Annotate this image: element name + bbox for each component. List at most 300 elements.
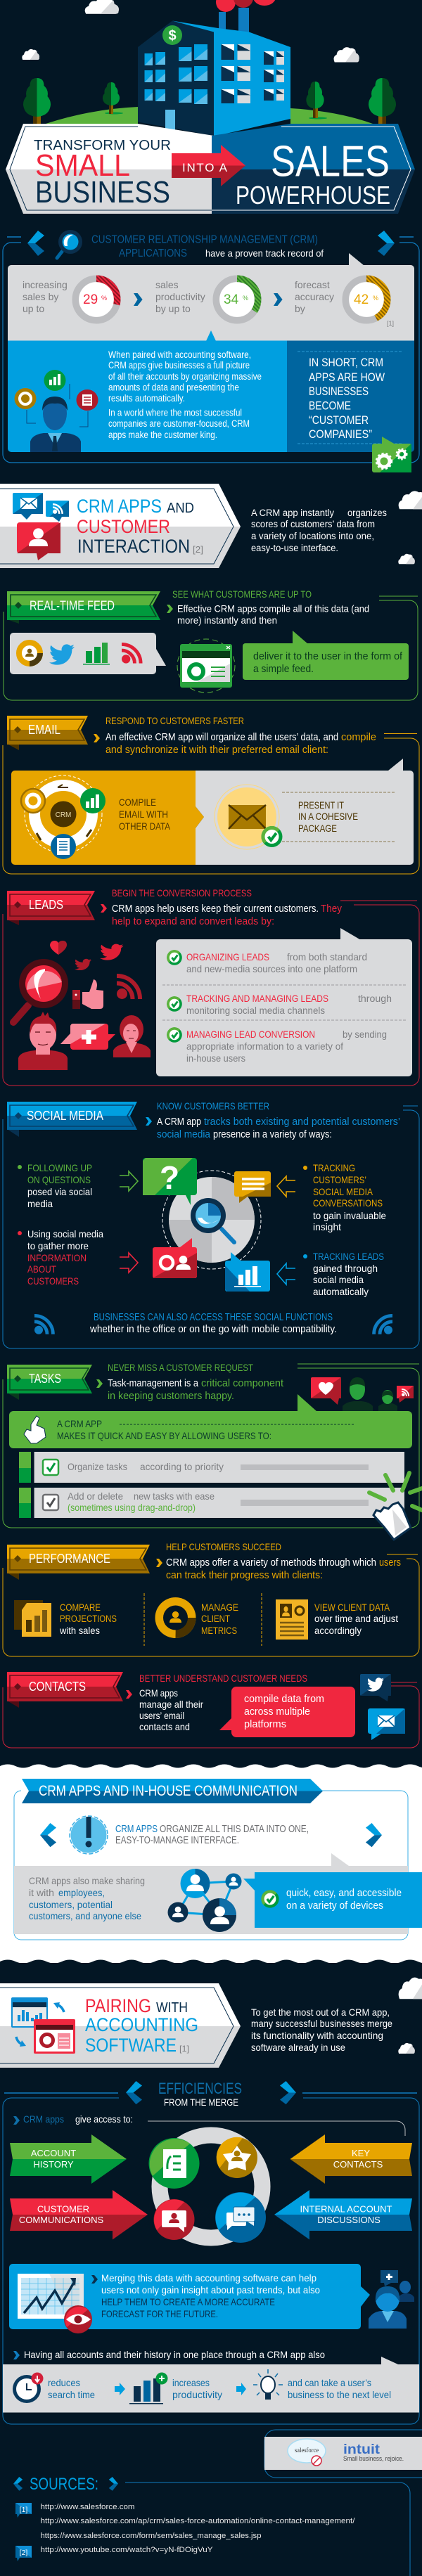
benefit: reduces search time bbox=[13, 2372, 95, 2403]
stat: 42 percent: [1] bbox=[387, 320, 394, 327]
arrow: key contacts bbox=[290, 2134, 412, 2184]
arrow: key contacts: CONTACTS bbox=[333, 2159, 383, 2170]
text: allowing users: MAKES IT QUICK AND EASY BY ALLOWING USERS TO: bbox=[57, 1430, 271, 1441]
text block: crm app intro: organizes bbox=[347, 508, 387, 518]
source links: http://www.youtube.com/watch?v=yN-fDOigVuY bbox=[41, 2546, 213, 2554]
arrow: into a: INTO A bbox=[182, 161, 228, 174]
item: managing lead conversion: by sending bbox=[343, 1029, 387, 1040]
logo: intuit: Small business, rejoice. bbox=[343, 2455, 404, 2463]
stat: 29 percent: 29 bbox=[83, 292, 98, 307]
text block: tracks customers bbox=[157, 1116, 400, 1140]
panel: in short callout: COMPANIES” bbox=[309, 427, 372, 441]
text: sharing: it with bbox=[29, 1887, 54, 1898]
text: organize interface: EASY-TO-MANAGE INTERFACE. bbox=[115, 1834, 239, 1846]
bubble: chart bbox=[225, 1252, 270, 1292]
panel: accounting explanation bbox=[8, 330, 287, 452]
icon: mail bubble bbox=[368, 1708, 405, 1740]
item: following up: ON QUESTIONS bbox=[27, 1174, 91, 1185]
arrow: account history: ACCOUNT bbox=[31, 2148, 76, 2158]
callout: simple feed bbox=[243, 631, 409, 680]
text block: task management: Task-management is a bbox=[108, 1378, 199, 1389]
ribbon: tasks bbox=[7, 1365, 92, 1400]
icon: magnifier bbox=[57, 230, 82, 258]
text: merging data: FORECAST FOR THE FUTURE. bbox=[101, 2308, 218, 2319]
icon: contact bubble bbox=[17, 522, 60, 560]
logo: salesforce bbox=[288, 2439, 326, 2466]
panel: in short callout bbox=[287, 340, 414, 452]
icon: chevron bbox=[101, 904, 107, 913]
heading: customer relationship management: CUSTOMER RELATIONSHIP MANAGEMENT (CRM) bbox=[91, 234, 318, 246]
text: merging data: Merging this data with accounting software can help bbox=[101, 2272, 316, 2284]
icon: chevron bbox=[146, 1117, 152, 1126]
callout: quick easy accessible: on a variety of devices bbox=[286, 1900, 383, 1912]
title text: sales powerhouse bbox=[236, 138, 390, 210]
icon: pointing hand bbox=[24, 1416, 46, 1443]
bubble: conversation bbox=[234, 1171, 271, 1203]
heading: pairing with accounting software bbox=[85, 1995, 198, 2056]
heading: customer relationship management: have a proven track record of bbox=[205, 247, 324, 259]
ribbon: social media: SOCIAL MEDIA bbox=[27, 1109, 103, 1123]
item: tracking leads: TRACKING LEADS bbox=[313, 1251, 384, 1262]
panel: quick and easy bbox=[9, 1394, 412, 1448]
icon: clicking hand bbox=[369, 1473, 422, 1540]
row: organize tasks bbox=[19, 1452, 404, 1483]
row: add or delete: new tasks with ease bbox=[134, 1490, 215, 1502]
section: leads bbox=[3, 887, 419, 1086]
text block: accounting software: apps make the customer king. bbox=[108, 430, 217, 440]
illustration: lead icons and people bbox=[13, 941, 151, 1070]
heading: customer relationship management: APPLICATIONS bbox=[119, 247, 187, 259]
text block: organize and compile: An effective CRM app will organize all the users’ data, and bbox=[106, 732, 338, 743]
ribbon: real-time feed: REAL-TIME FEED bbox=[30, 599, 115, 613]
item: gather information: to gather more bbox=[27, 1240, 89, 1251]
text: merging data bbox=[101, 2272, 320, 2319]
icon: left chevron bbox=[27, 231, 44, 256]
ribbon: email: EMAIL bbox=[28, 723, 60, 737]
title text: transform your small business: TRANSFORM YOUR bbox=[34, 138, 171, 153]
callout: compile data: compile data from bbox=[244, 1694, 324, 1705]
clouds: header bbox=[22, 0, 359, 62]
text: allowing users: A CRM APP bbox=[57, 1418, 102, 1429]
stat: 34 percent: % bbox=[243, 295, 248, 302]
item: tracking conversations: CONVERSATIONS bbox=[313, 1197, 383, 1209]
section: email bbox=[3, 715, 419, 874]
heading: customer relationship management bbox=[91, 234, 324, 259]
text block: tracks customers: presence in a variety of ways: bbox=[213, 1129, 332, 1140]
stat: 34 percent: by up to bbox=[155, 303, 191, 314]
text block: task management: in keeping customers happy. bbox=[108, 1391, 234, 1402]
item: manage client metrics: METRICS bbox=[201, 1625, 237, 1636]
text: crm apps give access: CRM apps bbox=[23, 2113, 64, 2125]
icon: chevron bbox=[156, 1559, 162, 1567]
text: compile email with other data: EMAIL WITH bbox=[119, 809, 168, 820]
icon: twitter bird bbox=[49, 644, 75, 665]
title text: sales powerhouse: SALES bbox=[271, 138, 390, 186]
stat: 34 percent bbox=[155, 278, 258, 321]
heading: crm apps and customer interaction bbox=[77, 496, 203, 557]
icon: customer communications bbox=[153, 2199, 194, 2240]
source links: http://www.salesforce.com/ap/crm/sales-force-automation/online-contact-management/ bbox=[41, 2517, 355, 2525]
ribbon: in-house communication: CRM APPS AND IN-HOUSE COMMUNICATION bbox=[39, 1783, 298, 1799]
text block: track progress bbox=[166, 1557, 401, 1581]
icon: chevron bbox=[91, 2275, 98, 2284]
item: view client data: VIEW CLIENT DATA bbox=[314, 1602, 390, 1613]
icon: birds bbox=[75, 944, 124, 970]
text block: accounting software: When paired with accounting software, bbox=[108, 349, 251, 360]
item: organizing leads: from both standard bbox=[287, 951, 367, 962]
icon: right chevron bbox=[280, 2081, 296, 2104]
illustration: factory with trees bbox=[23, 0, 396, 136]
icon: rss bbox=[122, 644, 141, 664]
text block: keep customers: CRM apps help users keep their current customers. bbox=[112, 903, 319, 915]
icon: key contacts bbox=[217, 2137, 257, 2178]
heading: pairing with accounting software: WITH bbox=[156, 2000, 188, 2016]
wave edge bbox=[0, 1960, 422, 1969]
text block: merge functionality: software already in use bbox=[251, 2042, 345, 2053]
diagram: people network bbox=[167, 1869, 242, 1932]
benefit: increases productivity bbox=[129, 2372, 222, 2404]
icon: account history bbox=[149, 2138, 200, 2189]
heading: crm apps and customer interaction: AND bbox=[167, 501, 194, 516]
badge: 1: [1] bbox=[20, 2506, 27, 2514]
item: organizing leads: and new-media sources into one platform bbox=[186, 963, 357, 974]
item: compare projections bbox=[14, 1600, 117, 1637]
heading: help customers succeed: HELP CUSTOMERS SUCCEED bbox=[166, 1541, 281, 1552]
text: allowing users bbox=[57, 1418, 271, 1441]
text: compile email with other data: OTHER DATA bbox=[119, 820, 171, 832]
text: present it in a cohesive package: PACKAGE bbox=[298, 823, 337, 834]
stat: 34 percent: productivity bbox=[155, 291, 205, 302]
bubble: question: ? bbox=[160, 1159, 179, 1196]
section: sources bbox=[13, 2475, 410, 2576]
item: tracking conversations: to gain invaluable bbox=[313, 1210, 386, 1221]
logo: intuit bbox=[343, 2442, 404, 2463]
title text: transform your small business: BUSINESS bbox=[35, 175, 170, 210]
text block: merge functionality: its functionality with accounting bbox=[251, 2030, 383, 2041]
item: compare projections: COMPARE bbox=[60, 1602, 101, 1613]
heading: crm apps and customer interaction: [2] bbox=[193, 544, 203, 555]
item: following up: posed via social bbox=[27, 1186, 92, 1197]
item: gather information: INFORMATION bbox=[27, 1252, 87, 1263]
text block: crm app intro: scores of customers’ data from bbox=[251, 519, 375, 529]
stat: 29 percent bbox=[23, 278, 117, 321]
icon: chevron bbox=[274, 293, 283, 306]
arrow: key contacts: KEY bbox=[352, 2148, 370, 2158]
arrow: into a bbox=[172, 145, 245, 186]
icon: right chevron bbox=[366, 1823, 382, 1847]
ribbon: contacts: CONTACTS bbox=[29, 1680, 86, 1694]
icon: contacts donut bbox=[19, 643, 43, 666]
panel: in short callout: BECOME bbox=[309, 399, 351, 412]
icon: magnifier bbox=[191, 1198, 234, 1242]
heading: pairing with accounting software: PAIRING bbox=[85, 1995, 151, 2016]
item: following up bbox=[18, 1162, 92, 1209]
arrow: account history: HISTORY bbox=[33, 2159, 74, 2170]
row: organize tasks: Organize tasks bbox=[68, 1461, 127, 1472]
diagram: crm cycle bbox=[21, 775, 106, 859]
source links: https://www.salesforce.com/form/sem/sales_manage_sales.jsp bbox=[41, 2532, 262, 2540]
text block: task management: critical component bbox=[201, 1378, 283, 1389]
text block: tracks customers: A CRM app bbox=[157, 1116, 201, 1128]
source links: http://www.salesforce.com bbox=[41, 2503, 135, 2511]
icon: heart bbox=[50, 941, 67, 955]
stat: 34 percent: sales bbox=[155, 279, 179, 290]
text: merging data: HELP THEM TO CREATE A MORE ACCURATE bbox=[101, 2296, 275, 2307]
heading: crm apps and customer interaction: INTERACTION bbox=[77, 536, 190, 557]
arrows: outline bbox=[120, 1171, 295, 1284]
text block: crm app intro: a variety of locations into one, bbox=[251, 531, 374, 541]
item: tracking leads: social media bbox=[313, 1274, 364, 1285]
clouds: right bbox=[398, 491, 422, 564]
heading: sources: SOURCES: bbox=[30, 2475, 98, 2494]
text block: organize and compile: compile bbox=[341, 732, 376, 743]
item: gather information: CUSTOMERS bbox=[27, 1275, 79, 1287]
illustration: factory with trees: $ bbox=[168, 28, 177, 44]
row: organize tasks: according to priority bbox=[140, 1461, 224, 1472]
figure: woman bbox=[113, 1015, 151, 1057]
text block: organize and compile: and synchronize it with their preferred email client: bbox=[106, 745, 328, 756]
item: tracking conversations: insight bbox=[313, 1221, 341, 1232]
text: merging data: users not only gain insight about past trends, but also bbox=[101, 2284, 320, 2295]
heading: begin the conversion process: BEGIN THE CONVERSION PROCESS bbox=[112, 887, 252, 899]
text block: accounting software: companies are customer-focused, CRM bbox=[108, 418, 250, 429]
text block: merge functionality: To get the most out of a CRM app, bbox=[251, 2007, 390, 2018]
item: organizing leads: ORGANIZING LEADS bbox=[186, 951, 269, 962]
item: tracking conversations: TRACKING bbox=[313, 1162, 355, 1173]
text block: track progress: users bbox=[379, 1557, 401, 1569]
section: crm applications proven track record bbox=[3, 230, 419, 472]
icon: chevron bbox=[167, 605, 173, 613]
badge: 2: [2] bbox=[20, 2549, 27, 2557]
ribbon: tasks: TASKS bbox=[29, 1372, 61, 1386]
badge: 2 bbox=[15, 2546, 32, 2561]
heading: never miss a customer request: NEVER MISS A CUSTOMER REQUEST bbox=[108, 1362, 253, 1373]
item: managing lead conversion: in-house users bbox=[186, 1052, 245, 1064]
arrow: customer communications bbox=[10, 2190, 148, 2240]
text block: crm app intro bbox=[251, 508, 387, 553]
icon: magnifier bbox=[13, 959, 68, 1022]
text block: keep customers: help to expand and convert leads by: bbox=[112, 916, 274, 927]
item: tracking conversations: CUSTOMERS’ bbox=[313, 1174, 366, 1185]
icon: rss bubble bbox=[46, 501, 69, 522]
text block: compile: more) instantly and then bbox=[177, 614, 277, 626]
item: managing lead conversion bbox=[167, 1027, 387, 1064]
section: efficiencies bbox=[3, 2080, 419, 2424]
icon: bar chart bbox=[83, 643, 110, 665]
heading: better understand customer needs: BETTER UNDERSTAND CUSTOMER NEEDS bbox=[139, 1673, 307, 1684]
text block: accounting software: results automatically. bbox=[108, 393, 185, 404]
ribbon: performance: PERFORMANCE bbox=[29, 1552, 110, 1566]
bubble: question bbox=[143, 1158, 197, 1205]
stat: 29 percent: % bbox=[101, 295, 107, 302]
text block: manage email contacts: contacts and bbox=[139, 1721, 190, 1732]
icon: rss bbox=[117, 976, 140, 999]
panel: compile email bbox=[11, 759, 414, 865]
banner: pairing with accounting software bbox=[0, 1983, 241, 2068]
arrow bbox=[236, 2383, 246, 2395]
text block: accounting software: CRM apps give businesses a full picture bbox=[108, 360, 250, 371]
text block: keep customers bbox=[112, 903, 343, 927]
panel: lead management list bbox=[156, 928, 412, 1076]
heading: pairing with accounting software: SOFTWARE bbox=[85, 2035, 177, 2056]
text: sharing: customers, and anyone else bbox=[29, 1910, 141, 1921]
text: crm apps give access bbox=[13, 2113, 133, 2125]
item: view client data: over time and adjust bbox=[314, 1613, 398, 1624]
item: tracking and managing leads: through bbox=[358, 993, 392, 1004]
item: managing lead conversion: appropriate information to a variety of bbox=[186, 1041, 343, 1052]
item: gather information bbox=[18, 1228, 103, 1287]
title text: transform your small business: SMALL bbox=[35, 148, 130, 183]
text block: accounting software: of all their accounts by organizing massive bbox=[108, 371, 262, 382]
icon: left chevron bbox=[126, 2081, 142, 2104]
text block: task management bbox=[108, 1378, 283, 1402]
icon: plus bubble bbox=[60, 1024, 115, 1050]
text block: mobile compatibility: whether in the office or on the go with mobile compatibility. bbox=[89, 1324, 337, 1335]
icon: internal discussions bbox=[215, 2192, 266, 2243]
heading: efficiencies: EFFICIENCIES bbox=[158, 2080, 242, 2097]
benefit: reduces search time: reduces bbox=[48, 2377, 80, 2388]
item: gather information: Using social media bbox=[27, 1228, 103, 1239]
ribbon: social media bbox=[7, 1102, 137, 1137]
stat: 42 percent: accuracy bbox=[295, 291, 334, 302]
text: compile email with other data: COMPILE bbox=[119, 797, 156, 808]
text block: manage email contacts: CRM apps bbox=[139, 1687, 178, 1699]
item: manage client metrics bbox=[155, 1597, 238, 1638]
text: sharing: employees, bbox=[58, 1887, 105, 1898]
item: following up: media bbox=[27, 1198, 53, 1209]
icon: chevron bbox=[126, 1690, 132, 1699]
icon: left chevron bbox=[40, 1823, 56, 1847]
item: view client data bbox=[276, 1599, 398, 1640]
title text: sales powerhouse: POWERHOUSE bbox=[236, 181, 390, 210]
icon: chevron bbox=[96, 1379, 103, 1388]
item: tracking and managing leads: TRACKING AND MANAGING LEADS bbox=[186, 993, 328, 1004]
white section background bbox=[0, 1765, 422, 1963]
diagram: social hub bbox=[143, 1158, 271, 1292]
stat: 42 percent: 42 bbox=[354, 292, 369, 307]
item: gather information: ABOUT bbox=[27, 1263, 56, 1275]
stat: 42 percent: by bbox=[295, 303, 305, 314]
banner: crm apps and customer interaction bbox=[0, 484, 241, 568]
stat: 29 percent: increasing bbox=[23, 279, 68, 290]
text block: track progress: CRM apps offer a variety of methods through which bbox=[166, 1557, 376, 1569]
figure: people with bubble bbox=[369, 2270, 414, 2329]
figure: man bbox=[18, 1012, 68, 1070]
callout: simple feed: deliver it to the user in the form of bbox=[253, 650, 403, 662]
icon: feed window bbox=[177, 639, 235, 693]
item: tracking leads bbox=[303, 1251, 384, 1297]
title banner bbox=[6, 124, 415, 214]
stat: 42 percent: % bbox=[373, 295, 378, 302]
icon: thumbs up bbox=[72, 979, 103, 1009]
item: tracking leads: gained through bbox=[313, 1263, 378, 1274]
text block: tracks customers: tracks both existing and potential customers’ bbox=[204, 1116, 400, 1128]
text: sharing: CRM apps also make sharing bbox=[29, 1875, 145, 1886]
ribbon: email bbox=[7, 716, 88, 750]
icon: right chevron bbox=[378, 231, 395, 256]
row: add or delete: (sometimes using drag-and-drop) bbox=[68, 1502, 196, 1513]
text block: crm app intro: A CRM app instantly bbox=[251, 508, 334, 518]
panel: data source icons bbox=[10, 633, 166, 674]
text: organize interface: CRM APPS bbox=[115, 1823, 158, 1835]
illustration: businessman with app icons bbox=[14, 370, 98, 452]
stat: 42 percent: forecast bbox=[295, 279, 330, 290]
section: tasks bbox=[3, 1362, 422, 1540]
diagram: access ring bbox=[149, 2135, 266, 2243]
item: manage client metrics: MANAGE bbox=[201, 1602, 238, 1613]
item: compare projections: PROJECTIONS bbox=[60, 1613, 117, 1624]
icon: gears bubble bbox=[372, 437, 411, 472]
icon: envelope with check bbox=[215, 785, 283, 849]
text block: accounting software: amounts of data and presenting the bbox=[108, 382, 239, 393]
text block: organize and compile bbox=[106, 732, 376, 756]
heading: see what customers are up to: SEE WHAT CUSTOMERS ARE UP TO bbox=[172, 588, 312, 600]
arrow: internal account discussions bbox=[274, 2190, 412, 2240]
stat: 29 percent: up to bbox=[23, 303, 44, 314]
icon: envelope bubble bbox=[13, 493, 43, 520]
panel: sharing bbox=[14, 1853, 408, 1934]
icon: right chevron bbox=[109, 2477, 118, 2491]
item: tracking conversations bbox=[303, 1162, 386, 1232]
item: tracking conversations: SOCIAL MEDIA bbox=[313, 1186, 373, 1197]
heading: respond to customers faster: RESPOND TO CUSTOMERS FASTER bbox=[106, 715, 244, 726]
panel: statistics bbox=[8, 253, 414, 340]
text: having all accounts: Having all accounts and their history in one place through a CRM app also bbox=[24, 2349, 325, 2360]
callout: compile data bbox=[219, 1687, 355, 1737]
callout: quick easy accessible: quick, easy, and accessible bbox=[286, 1888, 402, 1899]
section: social media bbox=[3, 1100, 419, 1348]
item: manage client metrics: CLIENT bbox=[201, 1613, 230, 1624]
clouds: right bbox=[398, 1978, 422, 2054]
chart: trend bbox=[18, 2274, 92, 2333]
heading: crm apps and customer interaction: CRM APPS bbox=[77, 496, 162, 517]
section: real-time feed bbox=[4, 588, 418, 700]
text block: track progress: can track their progress with clients: bbox=[166, 1570, 323, 1581]
icon: exclamation badge bbox=[70, 1816, 108, 1854]
text block: accounting software: In a world where the most successful bbox=[108, 408, 242, 418]
panel: in short callout: “CUSTOMER bbox=[309, 413, 369, 427]
text block: compile: Effective CRM apps compile all of this data (and bbox=[177, 603, 369, 614]
logos: salesforce and intuit bbox=[264, 2430, 422, 2478]
text block: tracks customers: social media bbox=[157, 1129, 211, 1140]
panel: forecast bbox=[9, 2264, 370, 2333]
arrow bbox=[115, 2383, 125, 2395]
text: sharing bbox=[29, 1875, 145, 1921]
panel: in short callout: APPS ARE HOW bbox=[309, 371, 385, 384]
logo: intuit: intuit bbox=[343, 2442, 381, 2457]
benefit: increases productivity: productivity bbox=[172, 2389, 222, 2400]
heading: efficiencies: FROM THE MERGE bbox=[164, 2097, 238, 2108]
benefit: next level bbox=[253, 2369, 391, 2400]
stat: 29 percent: sales by bbox=[23, 291, 58, 302]
panel: in short callout: IN SHORT, CRM bbox=[309, 356, 383, 369]
item: tracking leads: automatically bbox=[313, 1286, 369, 1297]
arrow: customer communications: COMMUNICATIONS bbox=[19, 2215, 104, 2225]
callout: simple feed: a simple feed. bbox=[253, 663, 314, 675]
arrow: account history bbox=[10, 2134, 127, 2184]
ribbon: leads: LEADS bbox=[29, 898, 63, 912]
item: following up: FOLLOWING UP bbox=[27, 1162, 92, 1173]
text block: merge functionality: many successful businesses merge bbox=[251, 2018, 392, 2029]
text: present it in a cohesive package: IN A COHESIVE bbox=[298, 811, 358, 822]
stat: 34 percent: 34 bbox=[224, 292, 239, 307]
ribbon: contacts bbox=[7, 1672, 123, 1708]
section: performance bbox=[3, 1541, 419, 1656]
logo: salesforce: salesforce bbox=[295, 2447, 319, 2454]
heading: pairing with accounting software: ACCOUNTING bbox=[85, 2014, 198, 2035]
icon: rss right bbox=[374, 1315, 392, 1334]
text: organize interface: ORGANIZE ALL THIS DATA INTO ONE, bbox=[160, 1823, 309, 1835]
